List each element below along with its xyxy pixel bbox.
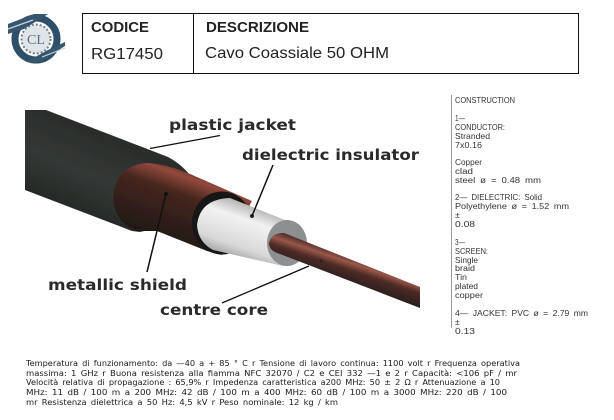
product description: Cavo Coassiale 50 OHM [205,45,389,62]
construction specs: SCREEN: [455,246,488,256]
footer technical description: Temperatura di funzionamento: da —40 a + 85 ° C r Tensione di lavoro continua: 1100 volt r Frequenza operativa [25,359,520,368]
construction specs: braid [455,263,475,273]
coaxial cable illustration [25,110,420,308]
leader: centre core [222,260,322,303]
construction specs: Polyethylene ø = 1.52 mm [455,201,569,211]
construction specs: 0.13 [455,326,475,336]
construction specs: Copper [455,157,482,167]
footer technical description: MHz: 11 dB / 100 m a 200 MHz: 42 dB / 100 m a 400 MHz: 60 dB / 100 m a 3000 MHz: 220 dB / 100 [26,388,507,397]
construction specs: ± [455,210,460,220]
leader: plastic jacket [150,136,220,148]
cable: shield rim [192,192,252,254]
footer technical description [25,359,520,407]
construction specs: steel ø = 0.48 mm [455,175,541,185]
construction specs: clad [455,166,473,176]
construction specs: ± [455,317,460,327]
company logo: CL [27,33,45,48]
leader: metallic shield [147,192,168,272]
cable: centre core [269,233,420,308]
header table [82,14,578,74]
cable: dielectric insulator [197,198,287,266]
company logo [8,14,65,62]
construction specs: CONDUCTOR: [455,122,505,132]
label: centre core: centre core [160,301,268,319]
column heading: codice: CODICE [91,20,149,36]
footer technical description: massima: 1 GHz r Buona resistenza alla fiamma NFC 32070 / C2 e CEI 332 —1 e 2 r Capacità: <106 pF / mr [26,369,518,378]
construction specs: Tin [455,272,467,282]
construction specs: 7x0.16 [455,140,482,150]
construction specs: 3— [455,237,465,247]
construction specs: Stranded [455,131,490,141]
column heading: descrizione: DESCRIZIONE [206,20,309,36]
cable: plastic jacket [25,110,192,232]
footer technical description: Velocità relativa di propagazione : 65,9% r Impedenza caratteristica a200 MHz: 50 ± 2 Ω r Attenuazione a 10 [26,378,500,387]
construction specs [452,95,588,336]
construction specs: copper [455,290,483,300]
construction specs: Single [455,255,478,265]
label: plastic jacket: plastic jacket [169,116,297,134]
footer technical description: mr Resistenza dielettrica a 50 Hz: 4,5 kV r Peso nominale: 12 kg / km [26,398,338,407]
construction specs: CONSTRUCTION [455,95,515,105]
leader: dielectric insulator [250,165,273,218]
construction specs: 0.08 [455,219,475,229]
label: dielectric insulator: dielectric insulator [242,146,419,164]
construction specs: 1— [455,113,465,123]
construction specs: plated [455,281,478,291]
construction specs: 2— DIELECTRIC: Solid [455,192,542,202]
cable: metallic shield [113,163,252,255]
cable: dielectric end face [267,220,307,266]
label: metallic shield: metallic shield [48,276,187,294]
product code: RG17450 [91,46,163,63]
construction specs: 4— JACKET: PVC ø = 2.79 mm [455,308,588,318]
